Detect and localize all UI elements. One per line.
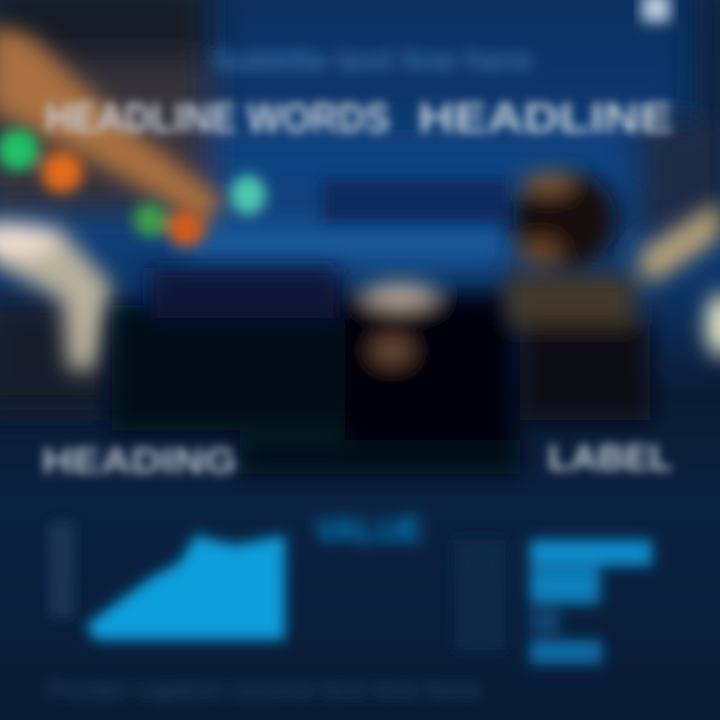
indicator dots <box>0 129 266 247</box>
right stat heading: LABEL <box>548 437 672 478</box>
left stat heading: HEADING <box>42 440 237 481</box>
area chart <box>50 522 285 640</box>
main heading: HEADLINE WORDS <box>45 94 390 141</box>
blue callout text: VALUE <box>315 509 423 550</box>
chart area <box>86 535 285 640</box>
main heading: HEADLINE <box>418 94 673 141</box>
top backdrop <box>0 0 720 410</box>
illustration: arm with indicators <box>0 25 266 370</box>
axis labels <box>50 522 74 618</box>
arm <box>0 25 225 370</box>
top corner icon <box>642 0 670 22</box>
blue label box <box>322 180 508 222</box>
illustration: person <box>505 172 720 420</box>
right bar list <box>455 540 652 664</box>
illustration: dark car <box>112 268 520 474</box>
footer caption: Footer caption source text line here <box>48 677 480 704</box>
main heading <box>45 94 673 141</box>
subtitle: Subtitle text line here <box>212 44 532 77</box>
